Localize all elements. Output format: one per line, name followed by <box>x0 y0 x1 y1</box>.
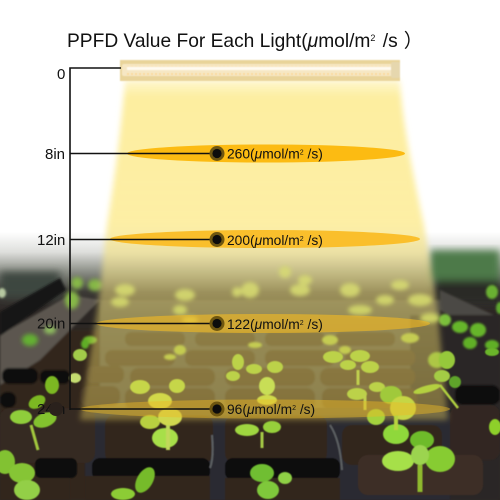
marker row: 8in: /s) <box>304 146 323 162</box>
marker row: 8in: 8in <box>45 146 65 163</box>
tray cells distant <box>80 332 417 410</box>
centre-left seedling <box>111 379 185 500</box>
height axis <box>70 68 121 410</box>
marker row: 0: 0 <box>57 66 65 83</box>
marker row: 12in: 200(μmol/m <box>227 233 300 248</box>
left seedlings <box>0 349 87 500</box>
marker row: 24in: 96(μmol/m <box>227 402 292 417</box>
marker row: 12in: 12in <box>37 232 65 249</box>
distant blurred seedlings <box>22 266 440 346</box>
centre-right seedlings <box>323 348 500 435</box>
title: 2 <box>370 33 375 43</box>
marker row: 20in: 2 <box>300 320 304 327</box>
title: ） <box>404 30 423 52</box>
marker row: 8in <box>45 144 405 163</box>
marker row: 12in <box>37 230 420 249</box>
marker row: 24in <box>37 400 450 418</box>
light beam <box>80 80 448 420</box>
marker row: 8in: 260(μmol/m <box>227 146 300 162</box>
marker row: 24in: /s) <box>296 402 315 417</box>
title: PPFD Value For Each Light(μmol/m <box>67 31 370 52</box>
marker row: 24in: 2 <box>292 405 296 412</box>
marker row: 12in: /s) <box>304 233 323 248</box>
marker row: 24in: 24in <box>37 401 65 418</box>
marker row: 20in <box>37 314 430 333</box>
leaf covering the 24in label <box>49 402 63 416</box>
title: /s <box>377 31 398 52</box>
marker row: 20in: 122(μmol/m <box>227 317 300 332</box>
mid-distance seedlings <box>0 285 500 368</box>
near seedlings <box>0 348 500 500</box>
marker row: 20in: /s) <box>304 317 323 332</box>
LED light bar <box>120 60 400 81</box>
marker row: 8in: 2 <box>300 150 304 156</box>
marker row: 20in: 20in <box>37 316 65 332</box>
centre seedlings <box>226 354 292 499</box>
large right seedlings <box>367 386 455 492</box>
marker row: 12in: 2 <box>300 236 304 243</box>
